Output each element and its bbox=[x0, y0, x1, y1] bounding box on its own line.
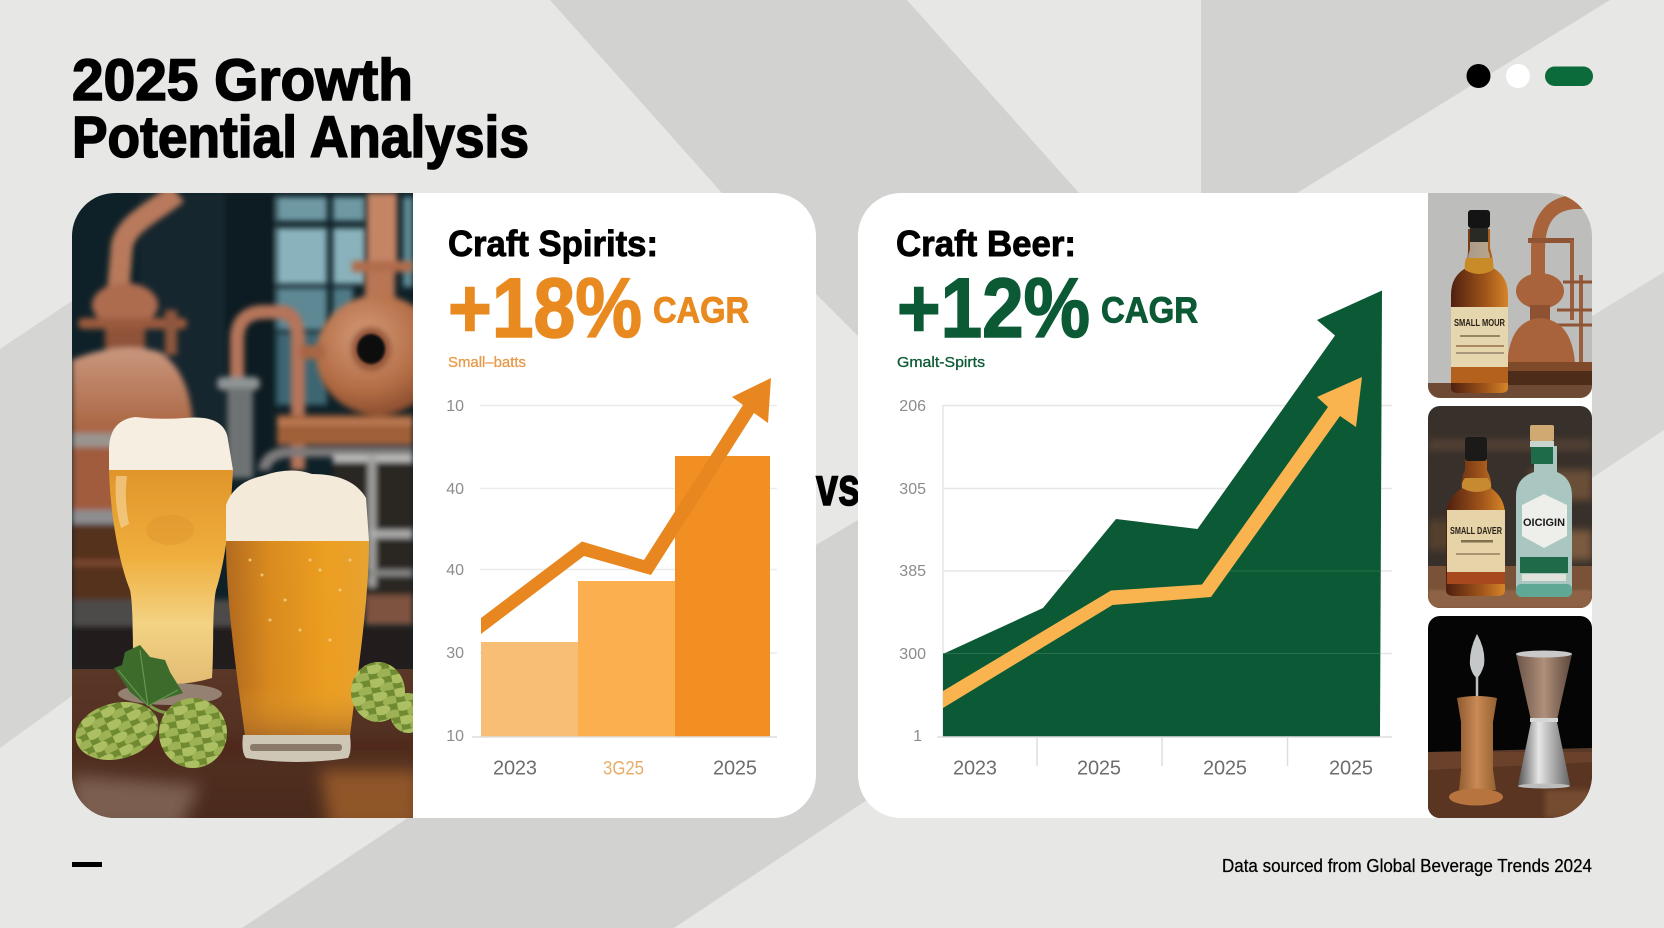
stat: +12% CAGR: CAGR bbox=[1101, 290, 1198, 330]
back glass of beer bbox=[109, 417, 233, 705]
subtitle: small batch: Small–batts bbox=[448, 354, 526, 371]
bar chart: craft spirits: 30 bbox=[446, 645, 464, 662]
panel: craft spirits bbox=[69, 193, 816, 830]
panel card bbox=[858, 193, 1592, 818]
area chart: craft beer bbox=[899, 290, 1392, 780]
front glass of beer bbox=[226, 470, 369, 762]
photo: whisky and gin bottles: OICIGIN bbox=[1523, 517, 1565, 529]
photo: beers and copper stills bbox=[69, 193, 440, 830]
stat: +18% CAGR: CAGR bbox=[653, 290, 749, 330]
heading: craft beer: Craft Beer: bbox=[896, 223, 1076, 264]
arrow: growth trend bbox=[481, 378, 771, 634]
arrow: growth trend bbox=[943, 377, 1362, 708]
panel card bbox=[72, 193, 816, 818]
area chart: craft beer: 2025 bbox=[1203, 758, 1247, 780]
area chart: craft beer: 305 bbox=[899, 481, 926, 498]
footer dash bbox=[72, 862, 102, 867]
title: 2025 Growth bbox=[72, 48, 413, 113]
area chart: craft beer: 385 bbox=[899, 563, 926, 580]
muddler bbox=[1476, 676, 1478, 696]
photo: whisky bottle and copper still: SMALL MOUR bbox=[1454, 318, 1506, 329]
bar chart: craft spirits: 40 bbox=[446, 562, 464, 579]
area chart: craft beer: 2025 bbox=[1077, 758, 1121, 780]
vs label: vs bbox=[816, 457, 860, 517]
photo: whisky and gin bottles bbox=[1428, 406, 1592, 608]
stat: +18% CAGR: +18% bbox=[448, 261, 642, 355]
photo: whisky and gin bottles: SMALL DAVER bbox=[1450, 526, 1503, 537]
stat: +12% CAGR: +12% bbox=[897, 261, 1090, 355]
table bbox=[72, 669, 413, 818]
bar chart: craft spirits: 10 bbox=[446, 398, 464, 415]
bar chart: craft spirits: 40 bbox=[446, 481, 464, 498]
area chart: craft beer: 2023 bbox=[953, 758, 997, 780]
panel: craft beer bbox=[858, 193, 1592, 822]
subtitle: small spirits: Gmalt-Spirts bbox=[897, 354, 985, 371]
area chart: craft beer: 300 bbox=[899, 646, 926, 663]
area chart: craft beer: 206 bbox=[899, 398, 926, 415]
hops and leaf bbox=[69, 645, 426, 768]
left still bbox=[72, 193, 413, 671]
source note: Data sourced from Global Beverage Trends 2024 bbox=[1222, 856, 1592, 876]
title bbox=[72, 48, 529, 170]
area chart: craft beer: 1 bbox=[913, 728, 922, 745]
status indicators bbox=[1466, 64, 1593, 88]
bar chart: craft spirits: 10 bbox=[446, 728, 464, 745]
photo: whisky bottle and copper still bbox=[1428, 193, 1592, 398]
bar chart: craft spirits: 2023 bbox=[493, 758, 537, 780]
jigger bbox=[1516, 654, 1572, 720]
photo: muddler and jigger bbox=[1428, 616, 1592, 822]
heading: craft spirits: Craft Spirits: bbox=[448, 223, 658, 264]
right still bbox=[217, 193, 440, 625]
bar chart: craft spirits: 2025 bbox=[713, 758, 757, 780]
title: Potential Analysis bbox=[72, 105, 529, 170]
bar chart: craft spirits bbox=[446, 378, 777, 780]
bar chart: craft spirits: 3G25 bbox=[603, 758, 644, 780]
area chart: craft beer: 2025 bbox=[1329, 758, 1373, 780]
